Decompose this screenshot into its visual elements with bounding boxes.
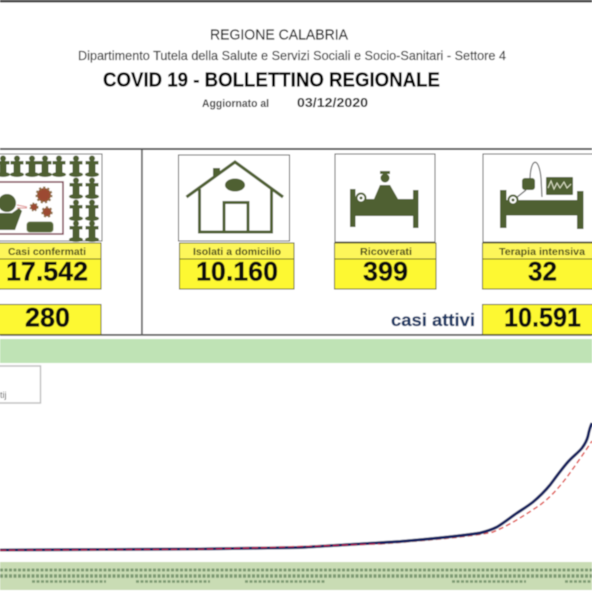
update date: 03/12/2020 <box>297 96 368 110</box>
value: 10.160: 10.160 <box>196 256 278 286</box>
main title: COVID 19 - BOLLETTINO REGIONALE <box>103 70 440 92</box>
panel: casi confermati <box>0 154 102 334</box>
icon: house <box>178 155 290 241</box>
dashed trend line <box>380 441 592 544</box>
solid cases line <box>0 423 592 550</box>
chart legend: tij <box>0 390 6 400</box>
icon: intensive care bed <box>483 154 592 242</box>
icon: hospital bed with patient <box>335 154 435 242</box>
label: terapia intensiva: Terapia intensiva <box>499 246 585 258</box>
casi attivi label: casi attivi <box>391 310 475 330</box>
value: 17.542: 17.542 <box>6 256 88 286</box>
green band <box>0 339 592 363</box>
panel: terapia intensiva <box>482 154 592 289</box>
region name: REGIONE CALABRIA <box>210 28 348 44</box>
chart legend <box>0 366 40 403</box>
label: casi confermati <box>0 243 101 259</box>
department: Dipartimento Tutela della Salute e Servizi Sociali e Socio-Sanitari - Settore 4 <box>78 49 506 63</box>
date axis band <box>0 562 592 590</box>
dashed trend overlay on baseline <box>0 544 380 550</box>
value: 32: 32 <box>528 256 557 286</box>
label: ricoverati: Ricoverati <box>360 246 412 258</box>
value: 280 <box>0 302 101 334</box>
value: 280: 280 <box>25 302 70 332</box>
value: 399: 399 <box>363 256 408 286</box>
panel: isolati a domicilio <box>178 155 294 289</box>
label: isolati a domicilio: Isolati a domicilio <box>193 246 281 258</box>
header titles <box>78 28 506 110</box>
label: casi confermati: Casi confermati <box>8 246 86 258</box>
icon: people and virus <box>0 154 102 242</box>
panel: ricoverati <box>334 154 436 289</box>
update label: Aggiornato al <box>202 98 269 110</box>
value: casi attivi 10.591: 10.591 <box>504 302 581 332</box>
line chart: cases curve <box>0 423 592 550</box>
